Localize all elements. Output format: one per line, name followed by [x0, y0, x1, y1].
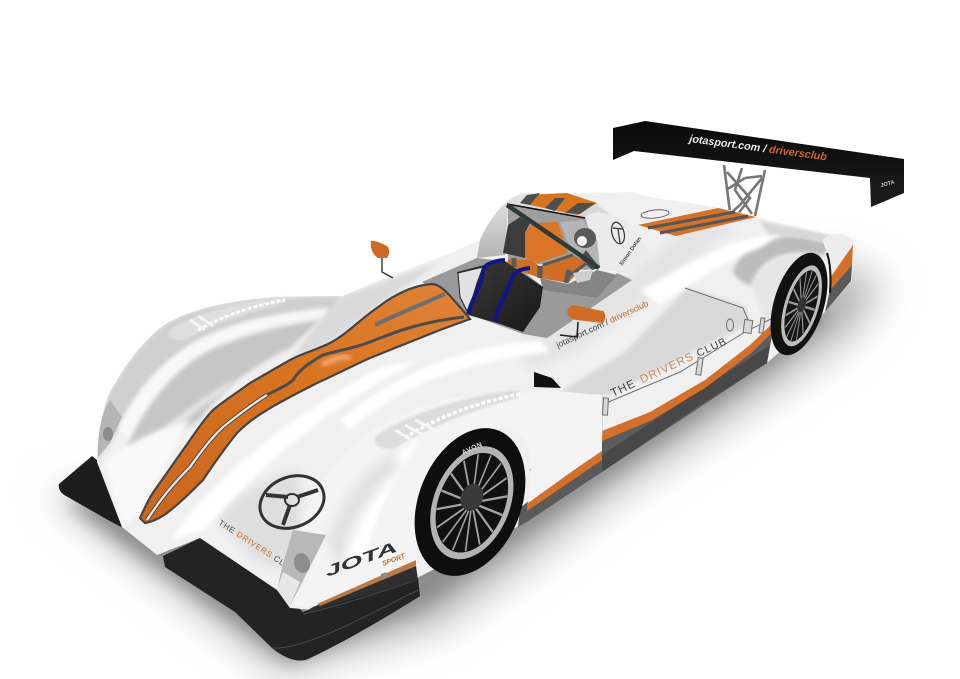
- wing struts: [724, 165, 765, 216]
- front side panel stripes: [518, 395, 602, 527]
- body shading: [97, 221, 833, 570]
- seat belts: [468, 260, 530, 322]
- left headlight: [98, 400, 122, 457]
- nose centre white stripe: [147, 395, 267, 520]
- rear rim: [773, 261, 830, 351]
- hoop steering wheel logo: [609, 221, 627, 245]
- left fender top: [97, 296, 342, 462]
- hoop interior: [508, 205, 600, 270]
- cockpit right wall: [540, 270, 617, 298]
- nose ridge panel: [295, 265, 434, 356]
- side pod and door: [560, 288, 750, 398]
- roll hoop fairing: [477, 193, 653, 272]
- roll bar: [507, 204, 599, 268]
- nose front fender panel: [218, 470, 300, 570]
- hoop orange stripes: [520, 193, 597, 215]
- front hub: [456, 480, 487, 514]
- front wheel: [394, 412, 546, 592]
- tyre brand: AVON: [461, 441, 484, 457]
- front bumper stripe: [303, 560, 418, 613]
- headrest: [503, 217, 593, 283]
- nose stripes: [140, 284, 470, 523]
- hoop side panel: [585, 213, 653, 272]
- fender to door highlight: [340, 340, 550, 430]
- front rim: [415, 434, 529, 572]
- hoop cavity: [560, 220, 600, 268]
- front fender vents: [375, 390, 520, 449]
- front splitter right: [163, 538, 420, 661]
- right headlight: [277, 530, 326, 606]
- wing end plate label: JOTA: [880, 180, 895, 189]
- rear quarter panel: [822, 234, 853, 312]
- splitter lip line: [272, 580, 418, 648]
- right mirror: [560, 305, 605, 337]
- nose highlight: [322, 357, 350, 365]
- driver seat: [457, 260, 543, 332]
- rear wing: [613, 121, 904, 216]
- door web address: jotasport.com / driversclub: [554, 298, 650, 350]
- seat side pad: [458, 267, 483, 313]
- nose grey wavy line: [267, 317, 464, 395]
- left mirror: [371, 241, 393, 278]
- rear wheel: [760, 246, 838, 362]
- black side intake: [534, 372, 561, 388]
- ground shadow: [50, 260, 885, 672]
- left fender vents: [169, 297, 287, 340]
- side team name: THE DRIVERS CLUB: [609, 335, 729, 400]
- main bodywork: [97, 192, 853, 610]
- nose left bright: [105, 420, 190, 527]
- hoop driver name: Simon Dolan: [619, 236, 643, 267]
- nose team name: THE DRIVERS CLUB: [217, 518, 297, 575]
- front fender: [277, 390, 602, 606]
- rear spokes: [778, 267, 825, 345]
- front splitter left: [59, 456, 142, 527]
- cockpit floor: [422, 258, 632, 338]
- rear deck stripes: [638, 208, 756, 236]
- left fender inner grey: [127, 319, 318, 446]
- side pod stripes: [602, 323, 773, 472]
- SPORT logo: SPORT: [381, 553, 407, 568]
- nose orange paint: [140, 284, 470, 523]
- panel lines and clips: [530, 288, 773, 470]
- JOTA logo: JOTA: [323, 539, 400, 581]
- rear haunch: [733, 236, 832, 285]
- left fender white band: [118, 308, 330, 440]
- wing blade: [613, 121, 904, 207]
- race car illustration: [48, 121, 904, 679]
- rear deck logo: [641, 209, 669, 219]
- steering wheel logo: [252, 466, 332, 538]
- wing web address: jotasport.com / driversclub: [687, 133, 828, 163]
- front spokes: [422, 443, 521, 563]
